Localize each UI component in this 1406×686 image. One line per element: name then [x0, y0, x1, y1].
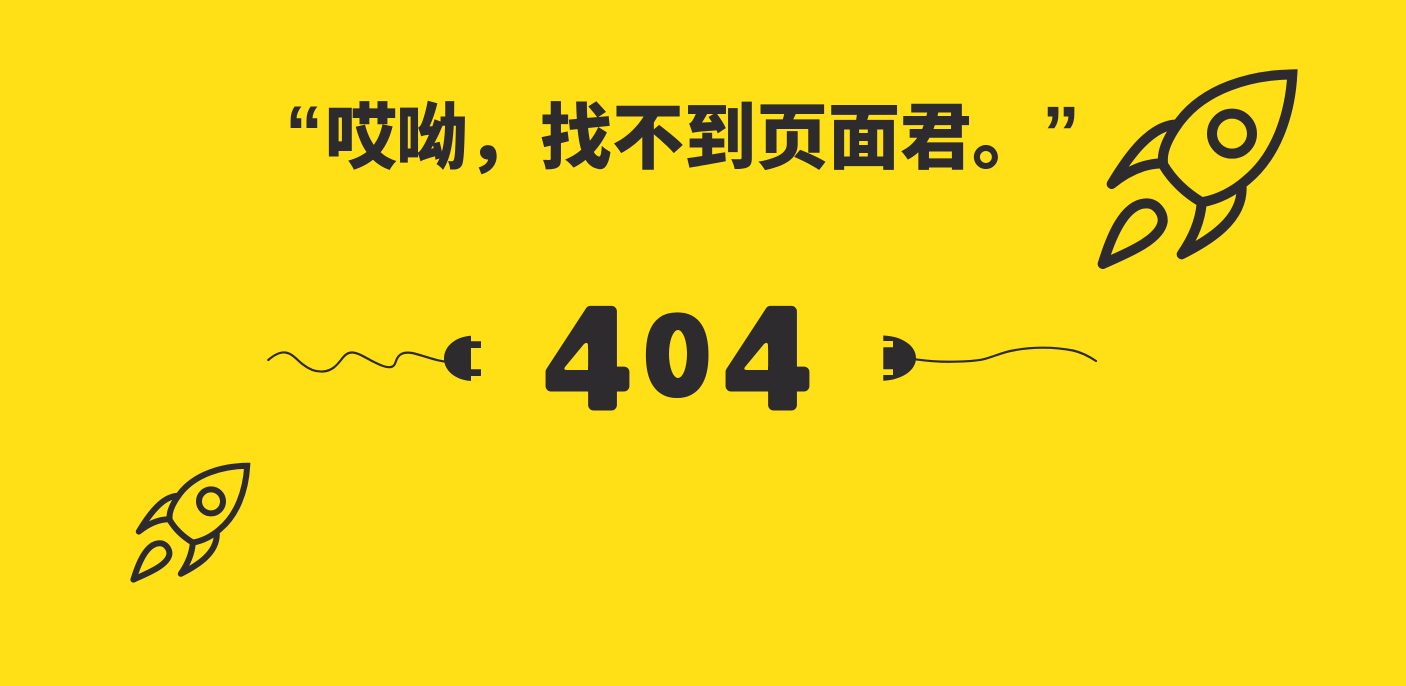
icon: small rocket [133, 466, 247, 580]
title: “ [285, 91, 323, 176]
404 number: 0 [650, 300, 705, 410]
icon: large rocket [1103, 74, 1292, 264]
icon: right plug with wire [883, 336, 1096, 381]
404 number [549, 282, 805, 434]
title: 哎呦，找不到页面君。 [325, 99, 1044, 179]
404 number: 4 [729, 282, 805, 434]
title: ” [1042, 91, 1080, 176]
icon: left plug with wire [268, 336, 481, 381]
404 number: 4 [549, 282, 625, 434]
